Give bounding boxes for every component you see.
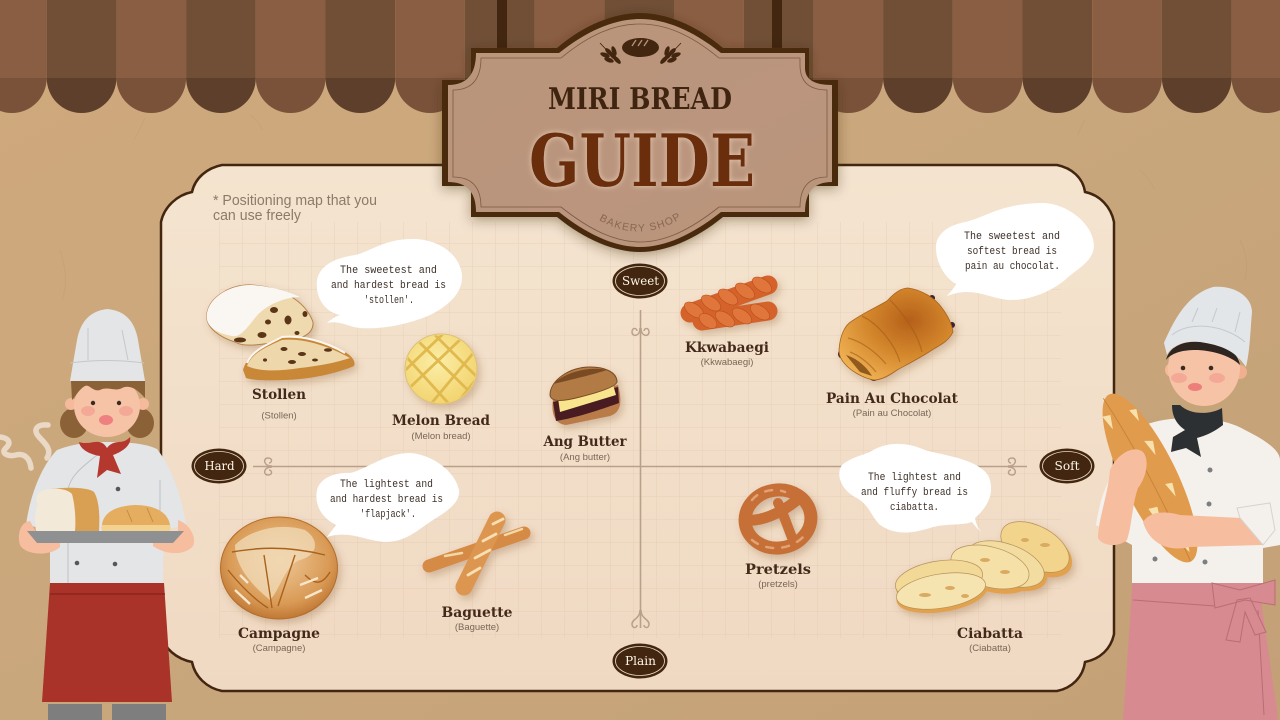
callout: flapjack: 'flapjack'. bbox=[360, 509, 416, 521]
label: Baguette bbox=[442, 605, 513, 633]
icon: loaves on tray bbox=[27, 488, 184, 543]
label: Pretzels: Pretzels bbox=[745, 562, 811, 578]
axis label: Sweet bbox=[612, 264, 668, 298]
panel: positioning map bbox=[161, 165, 1114, 691]
callout: stollen: and hardest bread is bbox=[331, 280, 446, 292]
label: Campagne: (Campagne) bbox=[253, 643, 305, 654]
apron: red bbox=[42, 583, 172, 702]
icon: black scarf bbox=[1171, 405, 1223, 457]
text: Bakery Shop: BAKERY SHOP bbox=[600, 213, 678, 232]
label: Kkwabaegi: (Kkwabaegi) bbox=[701, 357, 753, 368]
label: Pain Au Chocolat bbox=[826, 391, 959, 419]
label: Baguette: (Baguette) bbox=[455, 622, 499, 633]
bread: pretzels bbox=[741, 486, 815, 552]
axis label: Sweet: Sweet bbox=[622, 274, 659, 288]
icon: arm and hand, right bbox=[1143, 513, 1262, 549]
icon: arm and hand, left bbox=[1098, 449, 1147, 545]
bread: melon bread bbox=[404, 334, 484, 412]
callout: stollen bbox=[317, 239, 462, 328]
label: Ang Butter: (Ang butter) bbox=[560, 452, 610, 463]
label: Pretzels bbox=[745, 562, 811, 590]
label: Pretzels: (pretzels) bbox=[758, 579, 798, 590]
label: Baguette: Baguette bbox=[442, 605, 513, 621]
callout: pain au chocolat: softest bread is bbox=[967, 246, 1057, 258]
label: Stollen: Stollen bbox=[252, 387, 306, 403]
callout: ciabatta: ciabatta. bbox=[890, 502, 939, 514]
callout: stollen: The sweetest and bbox=[340, 265, 437, 277]
label: Pain Au Chocolat: Pain Au Chocolat bbox=[826, 391, 959, 407]
callout: ciabatta: and fluffy bread is bbox=[861, 487, 968, 499]
bread: pain au chocolat bbox=[838, 288, 955, 381]
callout: pain au chocolat bbox=[936, 203, 1094, 300]
label: Ang Butter: Ang Butter bbox=[543, 434, 627, 450]
bread: campagne bbox=[220, 517, 338, 619]
icon: bread and wheat bbox=[600, 38, 681, 65]
icon: hands bbox=[19, 520, 194, 554]
title: Guide: GUIDE bbox=[529, 118, 755, 203]
note: positioning map bbox=[213, 192, 377, 224]
callout: flapjack bbox=[316, 453, 459, 542]
label: Melon Bread: (Melon bread) bbox=[411, 431, 471, 442]
label: Ciabatta: (Ciabatta) bbox=[969, 643, 1011, 654]
label: Pain Au Chocolat: (Pain au Chocolat) bbox=[853, 408, 931, 419]
bread: stollen bbox=[207, 285, 355, 380]
label: Ang Butter bbox=[543, 434, 627, 463]
icon: chef hat bbox=[1164, 287, 1252, 367]
axis label: Soft: Soft bbox=[1054, 459, 1080, 473]
label: Stollen bbox=[252, 387, 306, 422]
bread: baguette bbox=[429, 519, 524, 587]
icon: apron bow bbox=[1212, 580, 1275, 642]
title: Miri Bread: MIRI BREAD bbox=[548, 82, 732, 117]
apron: pink bbox=[1123, 583, 1278, 720]
callout: flapjack: The lightest and bbox=[340, 479, 433, 491]
icon: baguette bbox=[1085, 383, 1215, 573]
chef: man with baguette bbox=[1085, 287, 1280, 720]
callout: pain au chocolat: The sweetest and bbox=[964, 231, 1060, 243]
callout: flapjack: and hardest bread is bbox=[330, 494, 443, 506]
bread: ciabatta bbox=[893, 511, 1081, 619]
callout: ciabatta: The lightest and bbox=[868, 472, 961, 484]
note: positioning map: can use freely bbox=[213, 207, 301, 224]
label: Ciabatta: Ciabatta bbox=[957, 626, 1023, 642]
axis label: Hard: Hard bbox=[204, 459, 235, 473]
label: Melon Bread bbox=[392, 413, 490, 442]
axis: horizontal bbox=[253, 458, 1027, 475]
callout: ciabatta bbox=[839, 444, 991, 533]
axis label: Hard bbox=[192, 448, 246, 484]
bread: kkwabaegi bbox=[682, 274, 774, 332]
label: Campagne bbox=[238, 626, 320, 654]
label: Kkwabaegi: Kkwabaegi bbox=[685, 340, 769, 356]
label: Kkwabaegi bbox=[685, 340, 769, 368]
axis label: Plain bbox=[612, 644, 668, 678]
awning bbox=[0, 0, 1280, 113]
label: Ciabatta bbox=[957, 626, 1023, 654]
callout: pain au chocolat: pain au chocolat. bbox=[965, 261, 1060, 273]
title plaque bbox=[434, 0, 846, 263]
icon: chef hat bbox=[70, 309, 145, 381]
icon: steam bbox=[0, 425, 49, 468]
axis label: Plain: Plain bbox=[625, 654, 656, 668]
label: Stollen: (Stollen) bbox=[261, 410, 297, 422]
axis: vertical bbox=[632, 310, 649, 628]
note: positioning map: * Positioning map that you bbox=[213, 192, 377, 209]
callout: stollen: 'stollen'. bbox=[364, 295, 414, 307]
label: Melon Bread: Melon Bread bbox=[392, 413, 490, 429]
axis label: Soft bbox=[1040, 448, 1094, 484]
bread: ang butter bbox=[550, 367, 620, 425]
label: Campagne: Campagne bbox=[238, 626, 320, 642]
chef: woman with tray bbox=[0, 309, 194, 720]
